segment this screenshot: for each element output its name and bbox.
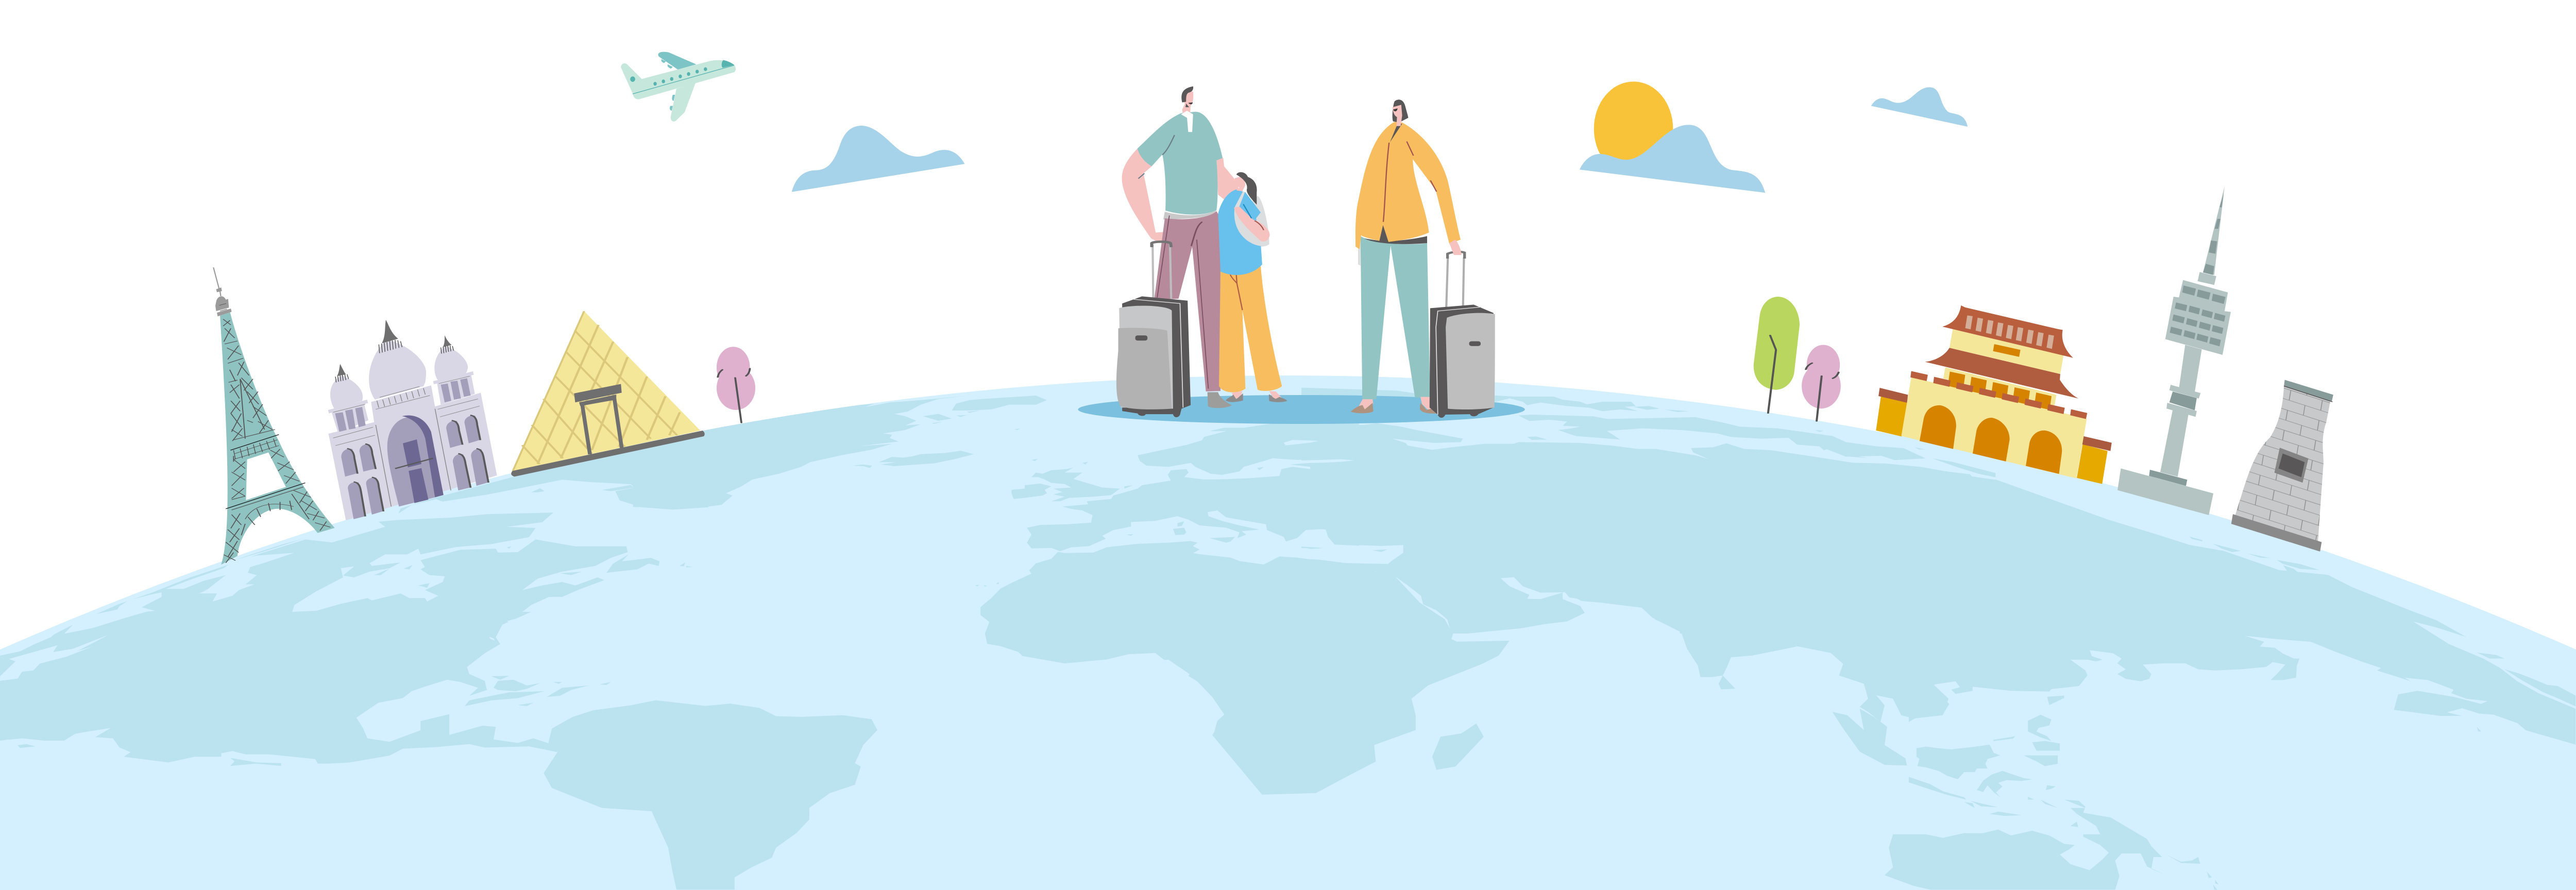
man (1122, 87, 1240, 408)
left landmarks (213, 267, 755, 564)
tower windows (335, 378, 470, 432)
globe (0, 375, 2576, 890)
right landmarks (1754, 186, 2333, 552)
land: South America (544, 700, 877, 889)
sun (1594, 81, 1673, 176)
right suitcase (1430, 239, 1495, 418)
land: South Asia and Africa east (1109, 570, 1948, 795)
Sacre-Coeur basilica (328, 320, 497, 520)
cloud over sun (1580, 125, 1765, 193)
ground shadow ellipse (1078, 395, 1525, 424)
left suitcase (1116, 242, 1191, 417)
fuselage (621, 60, 736, 99)
cloud: left (792, 126, 965, 192)
woman (1351, 99, 1461, 414)
airplane (621, 52, 736, 122)
Gwanghwamun gate (1876, 305, 2112, 484)
far wing (658, 52, 697, 70)
tree: green (1754, 297, 1800, 413)
central arch (387, 418, 435, 506)
tree: pink right (1802, 345, 1841, 421)
girl (1218, 172, 1287, 402)
small cloud (1871, 87, 1968, 127)
ocean (0, 375, 2576, 890)
domes (330, 340, 468, 409)
basilica linework (333, 376, 480, 506)
land: North America (0, 430, 708, 766)
tree: pink left (717, 347, 755, 423)
Cheomseongdae observatory (2231, 380, 2333, 552)
N Seoul Tower (2117, 186, 2231, 515)
Eiffel Tower (213, 267, 335, 564)
plane windows (630, 67, 707, 85)
fuselage stripe (633, 65, 734, 94)
land: Greenland, Europe and north-west Africa (633, 396, 1359, 737)
basilica body (329, 385, 497, 520)
land: northern Asia (1301, 388, 1995, 634)
engines (670, 95, 675, 111)
travelling family (1116, 87, 1495, 418)
near wing (671, 83, 696, 122)
Louvre pyramid (511, 311, 705, 476)
cockpit window (722, 60, 734, 68)
spires (337, 320, 452, 376)
land: East Asia, islands and Australia (1885, 480, 2575, 890)
sun and clouds (1580, 81, 1968, 193)
side arches (341, 416, 488, 519)
